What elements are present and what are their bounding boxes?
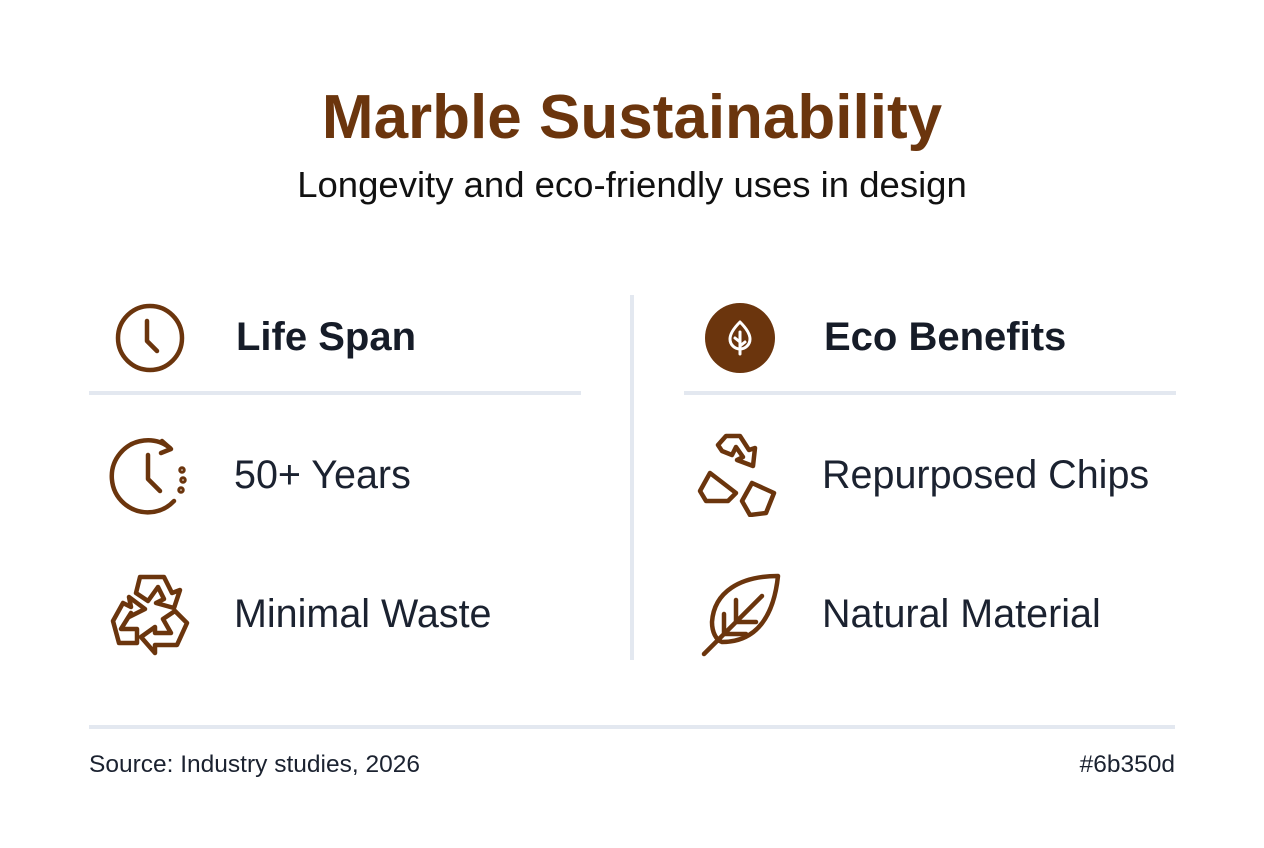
- footer: source: Source: Industry studies, 2026: [89, 751, 420, 778]
- title: Marble Sustainability: [322, 83, 942, 152]
- subtitle: Longevity and eco-friendly uses in design: [297, 164, 967, 205]
- panel: life span: [89, 304, 581, 656]
- icon: clock with arrow: [110, 438, 187, 515]
- text: 50+ years: 50+ Years: [234, 453, 411, 497]
- text: natural material: Natural Material: [822, 592, 1101, 636]
- icon: leaf: [702, 574, 780, 656]
- text: minimal waste: Minimal Waste: [234, 592, 492, 636]
- footer: color code: #6b350d: [1080, 751, 1175, 778]
- icon: leaf badge: [705, 303, 775, 373]
- heading: life span: Life Span: [236, 315, 416, 359]
- icon: recycle: [110, 574, 190, 656]
- icon: repurposed chips: [698, 434, 776, 517]
- text: repurposed chips: Repurposed Chips: [822, 453, 1149, 497]
- heading: eco benefits: Eco Benefits: [824, 315, 1066, 359]
- panel: eco benefits: [684, 303, 1176, 656]
- icon: clock: [116, 304, 184, 372]
